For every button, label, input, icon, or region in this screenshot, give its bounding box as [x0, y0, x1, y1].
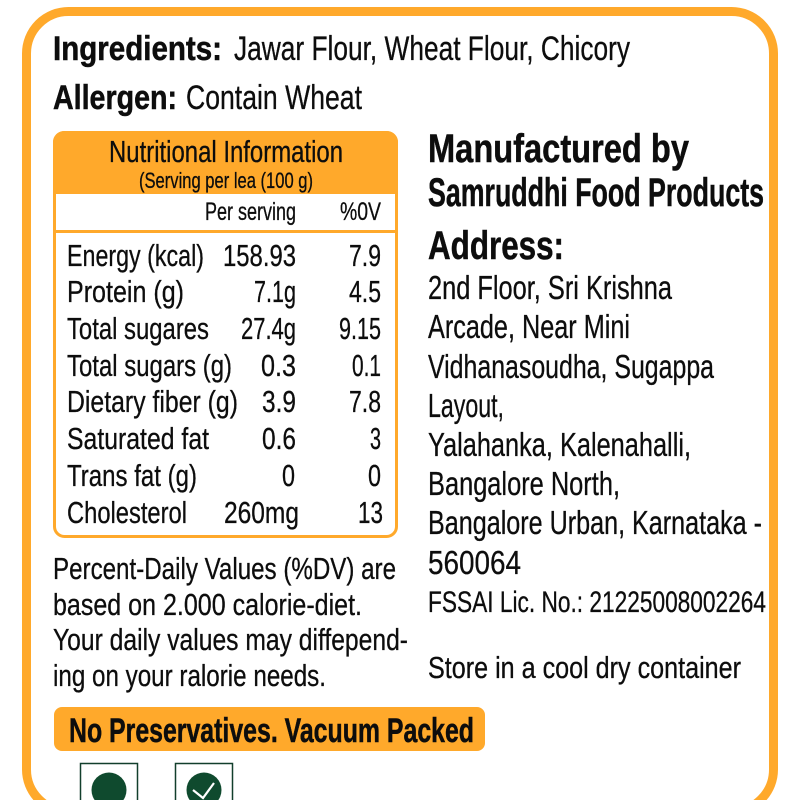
nutrient rows: 7.9 [349, 238, 381, 273]
nutrient rows: Dietary fiber (g) [67, 384, 238, 419]
nutrient rows: 3 [370, 421, 381, 456]
nutrient rows: Energy (kcal) [67, 238, 204, 273]
nutrient rows [67, 238, 383, 530]
nutrient rows: 0.1 [352, 348, 381, 383]
text block: daily values note: Your daily values may diffepend- [53, 622, 408, 657]
nutrient rows: Saturated fat [67, 421, 209, 456]
column headers: Per serving [205, 198, 296, 226]
icon: check mark [176, 764, 232, 800]
table header background [53, 131, 398, 194]
text block: address: Arcade, Near Mini [428, 308, 630, 345]
text block: daily values note: based on 2.000 calorie-diet. [53, 587, 362, 622]
table frame [54, 132, 396, 536]
nutrient rows: 0 [282, 458, 295, 493]
banner: no preservatives: No Preservatives. Vacuum Packed [69, 712, 474, 750]
heading: manufacturer [428, 127, 764, 215]
nutrient rows: 3.9 [262, 384, 296, 419]
text block: address [428, 269, 762, 581]
icon: vegetarian mark [80, 764, 138, 800]
table title: Nutritional Information [109, 134, 343, 169]
nutrient rows: 260mg [224, 495, 299, 530]
table subtitle: (Serving per lea (100 g) [139, 168, 313, 193]
nutrient rows: 158.93 [223, 238, 296, 273]
heading: ingredients: Jawar Flour, Wheat Flour, Chicory [234, 30, 630, 68]
nutrient rows: 0.3 [261, 348, 296, 383]
text block: address: Bangalore North, [428, 465, 620, 502]
nutrient rows: Protein (g) [67, 274, 184, 309]
heading: ingredients [53, 30, 630, 68]
nutrient rows: Cholesterol [67, 495, 187, 530]
heading: allergen [53, 79, 362, 117]
heading: manufacturer: Manufactured by [428, 127, 690, 171]
text block: daily values note: Percent-Daily Values (%DV) are [53, 551, 396, 586]
nutrient rows: 4.5 [349, 274, 381, 309]
heading: address: Address: [428, 224, 564, 268]
text block: address: 2nd Floor, Sri Krishna [428, 269, 672, 306]
nutrient rows: Total sugares [67, 311, 209, 346]
nutrient rows: 7.8 [349, 384, 381, 419]
nutrient rows: 7.1g [254, 274, 296, 309]
nutrient rows: 9.15 [339, 311, 381, 346]
nutrient rows: 0.6 [262, 421, 296, 456]
nutrient rows: Total sugars (g) [67, 348, 232, 383]
nutrient rows: 13 [358, 495, 383, 530]
text block: daily values note [53, 551, 408, 693]
heading: allergen: Allergen: [53, 79, 177, 117]
nutrient rows: 0 [368, 458, 381, 493]
nutrient rows: 27.4g [241, 311, 296, 346]
text block: address: 560064 [428, 544, 521, 581]
nutrient rows: Trans fat (g) [67, 458, 197, 493]
column headers: %0V [340, 198, 381, 226]
banner: no preservatives [54, 707, 485, 751]
text block: address: Yalahanka, Kalenahalli, [428, 426, 691, 463]
heading: allergen: Contain Wheat [186, 79, 362, 117]
heading: ingredients: Ingredients: [53, 30, 222, 68]
text block: address: Layout, [428, 387, 504, 424]
text block: address: Vidhanasoudha, Sugappa [428, 348, 714, 385]
text block: daily values note: ing on your ralorie needs. [53, 658, 326, 693]
panel: nutrition table [53, 131, 398, 536]
